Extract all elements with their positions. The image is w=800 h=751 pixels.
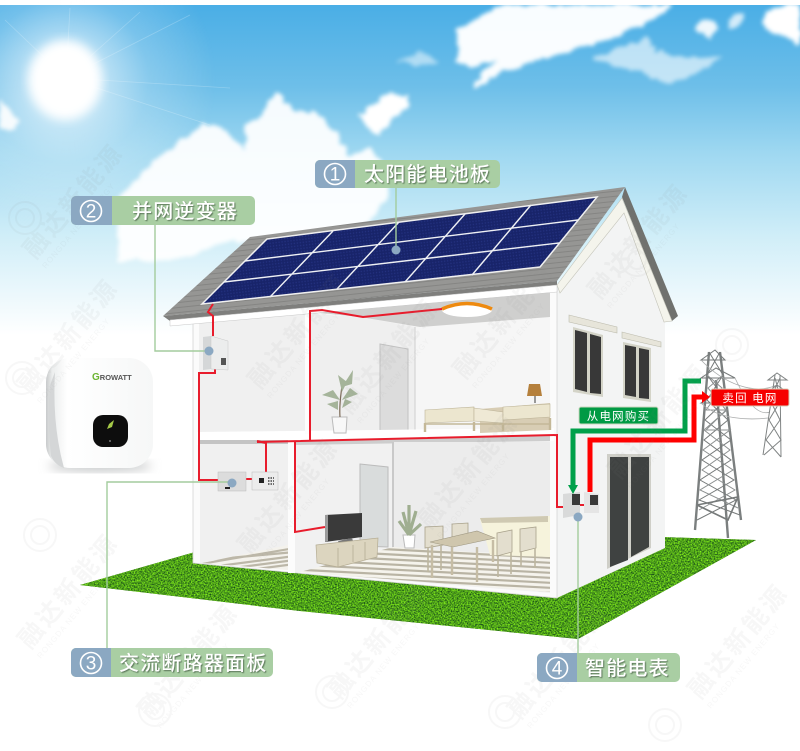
lawn [80,537,756,639]
lower left room [200,444,288,570]
grid-tie inverter on wall [203,336,228,370]
watermarks: RONGDA NEW ENERGY [435,451,512,540]
watermarks [6,139,800,741]
watermarks: RONGDA NEW ENERGY [470,301,547,390]
living room TV and cabinet [316,513,378,567]
floor band [197,428,554,445]
AC breaker panels [218,472,278,491]
large transmission tower [695,350,777,538]
callout 2: grid-tie inverter: 2 [86,202,96,222]
callout 2: grid-tie inverter [71,196,255,225]
bedroom door [380,344,408,433]
sky background [0,5,800,335]
watermarks: 融达新能源 [18,139,130,264]
right side wall [557,208,665,598]
brand text: GROWATT [92,372,132,383]
watermarks: 融达新能源 [243,269,355,394]
label: buy from grid [579,407,658,424]
watermarks: RONGDA NEW ENERGY [265,311,342,400]
upper windows [569,315,661,402]
dining set [425,516,550,582]
sun [0,0,230,230]
watermarks: 融达新能源 [413,409,525,534]
callout 4: smart meter [537,653,680,682]
watermarks: 融达新能源 [133,599,245,724]
watermarks: RONGDA NEW ENERGY [625,401,702,490]
label: buy from grid: 从电网购买 [587,409,650,423]
watermarks: RONGDA NEW ENERGY [35,571,112,660]
sofa and bed [425,403,550,433]
callout 4: smart meter: 智能电表 [585,657,670,680]
upper right room [311,289,550,433]
callout 3: AC breaker panel: 交流断路器面板 [119,652,267,675]
watermarks: 融达新能源 [333,294,445,419]
leader line: breaker panel [107,478,236,648]
house [193,208,665,598]
label: sell to grid: 卖回 电网 [722,392,778,405]
watermarks: RONGDA NEW ENERGY [355,336,432,425]
roof [163,187,678,326]
arrow: buy from grid [568,381,701,494]
living room plant [399,505,421,548]
watermarks: RONGDA NEW ENERGY [155,641,232,730]
potted plant upstairs [322,370,358,433]
watermarks: 融达新能源 [233,434,345,559]
bedroom furniture [425,384,550,433]
ceiling lamp [442,303,492,317]
watermarks: 融达新能源 [448,259,560,384]
clouds [0,5,800,260]
living room door [360,464,388,547]
callout 4: smart meter: 4 [552,658,563,680]
callout 1: solar panel: 太阳能电池板 [364,163,491,186]
table lamp [527,384,542,403]
leader line: inverter [155,225,214,356]
callout 1: solar panel [315,160,500,188]
watermarks: RONGDA NEW ENERGY [255,476,332,565]
callout 3: AC breaker panel [71,648,273,677]
callout 2: grid-tie inverter: 并网逆变器 [132,200,238,223]
electrical wiring [199,304,585,532]
watermarks: RONGDA NEW ENERGY [345,621,422,710]
watermarks: 融达新能源 [323,579,435,704]
solar panel array [202,197,597,304]
lower right room [295,441,550,593]
watermarks: 融达新能源 [13,529,125,654]
callout 1: solar panel: 1 [330,164,340,186]
watermarks: 融达新能源 [503,599,615,724]
label: sell to grid [711,389,789,406]
watermarks: 融达新能源 [603,359,715,484]
balcony door [607,454,651,569]
smart meters [563,492,599,518]
watermarks: RONGDA NEW ENERGY [35,316,112,405]
watermarks: 融达新能源 [13,274,125,399]
arrow: sell to grid [590,391,710,492]
watermarks: RONGDA NEW ENERGY [705,621,782,710]
watermarks: RONGDA NEW ENERGY [525,641,602,730]
display window [93,415,128,447]
callout 3: AC breaker panel: 3 [86,654,96,674]
cutaway front frame [193,288,557,598]
upper left room [199,310,305,432]
leader line: solar panel [392,188,400,254]
watermarks: RONGDA NEW ENERGY [40,181,117,270]
lower dividers [288,443,295,573]
watermarks: RONGDA NEW ENERGY [605,221,682,310]
watermarks: 融达新能源 [583,179,695,304]
product photo: Growatt inverter [46,358,153,472]
watermarks: 融达新能源 [683,579,795,704]
leader line: smart meter [574,512,582,653]
small transmission tower [763,373,787,457]
